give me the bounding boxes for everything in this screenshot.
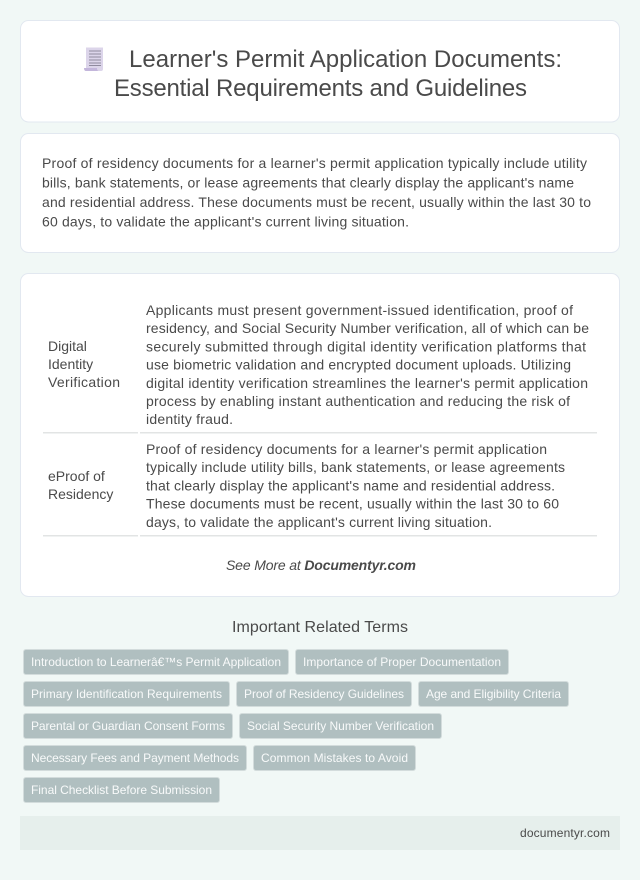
row text: Digital Identity Verification: use biometric validation and encrypted document uploads. Utilizing bbox=[146, 357, 571, 373]
row label: Digital Identity Verification: Identity bbox=[48, 356, 93, 372]
intro paragraph: 60 days, to validate the applicant's current living situation. bbox=[42, 214, 409, 230]
related term chips bbox=[24, 650, 568, 802]
row text: eProof of Residency: Proof of residency documents for a learner's permit application bbox=[146, 441, 547, 457]
row label: Digital Identity Verification bbox=[48, 338, 120, 390]
icon: document scroll bbox=[84, 48, 103, 71]
chip bbox=[24, 714, 232, 738]
row text: Digital Identity Verification: residency, and Social Security Number verification, all of which can be bbox=[146, 320, 589, 336]
row text: Digital Identity Verification: process by enabling instant authentication and reducing the risk of bbox=[146, 393, 570, 409]
chip bbox=[240, 714, 442, 738]
title bbox=[114, 46, 562, 102]
chip bbox=[24, 778, 220, 802]
footer bar bbox=[20, 816, 620, 850]
title: Learner's Permit Application Documents: bbox=[129, 46, 562, 73]
chip: Introduction to Learnerâ€™s Permit Application bbox=[31, 655, 281, 669]
chip: Final Checklist Before Submission bbox=[31, 783, 212, 797]
row label: Digital Identity Verification: Digital bbox=[48, 338, 87, 354]
row text: eProof of Residency: that clearly display the applicant's name and residential address. bbox=[146, 477, 555, 493]
see more link: See More at Documentyr.com bbox=[226, 557, 416, 573]
chip bbox=[418, 682, 568, 706]
intro paragraph: bills, bank statements, or lease agreements that clearly display the applicant's name bbox=[42, 174, 574, 190]
chip: Primary Identification Requirements bbox=[31, 687, 222, 701]
panel: introduction bbox=[20, 134, 620, 252]
intro paragraph: and residential address. These documents must be recent, usually within the last 30 to bbox=[42, 194, 591, 210]
chip bbox=[24, 682, 230, 706]
chip: Social Security Number Verification bbox=[247, 719, 434, 733]
chip bbox=[236, 682, 412, 706]
row label: eProof of Residency bbox=[48, 468, 113, 502]
chip: Necessary Fees and Payment Methods bbox=[31, 751, 239, 765]
row text: eProof of Residency: days, to validate the applicant's current living situation. bbox=[146, 514, 492, 530]
chip: Proof of Residency Guidelines bbox=[244, 687, 404, 701]
chip bbox=[24, 650, 288, 674]
chip: Common Mistakes to Avoid bbox=[261, 751, 408, 765]
row text: Digital Identity Verification: securely submitted through digital identity verification platforms that bbox=[146, 338, 586, 354]
row text: Digital Identity Verification bbox=[146, 302, 589, 427]
chip: Age and Eligibility Criteria bbox=[426, 687, 561, 701]
intro paragraph: Proof of residency documents for a learner's permit application typically include utility bbox=[42, 155, 587, 171]
row label: eProof of Residency: Residency bbox=[48, 486, 113, 502]
row text: Digital Identity Verification: Applicants must present government-issued identification, proof of bbox=[146, 302, 573, 318]
row text: Digital Identity Verification: identity fraud. bbox=[146, 411, 233, 427]
row label: eProof of Residency: eProof of bbox=[48, 468, 105, 484]
row text: eProof of Residency: These documents must be recent, usually within the last 30 to 60 bbox=[146, 496, 559, 512]
row text: eProof of Residency: typically include utility bills, bank statements, or lease agreements bbox=[146, 459, 565, 475]
panel: document table bbox=[20, 274, 620, 596]
row text: Digital Identity Verification: digital identity verification streamlines the learner's permit application bbox=[146, 375, 588, 391]
title: Essential Requirements and Guidelines bbox=[114, 75, 527, 102]
heading: related terms: Important Related Terms bbox=[232, 619, 408, 636]
chip bbox=[24, 746, 246, 770]
row text: eProof of Residency bbox=[146, 441, 565, 530]
chip: Importance of Proper Documentation bbox=[303, 655, 501, 669]
chip: Parental or Guardian Consent Forms bbox=[31, 719, 225, 733]
chip bbox=[254, 746, 416, 770]
row label: Digital Identity Verification: Verification bbox=[48, 374, 120, 390]
panel: title card bbox=[20, 20, 620, 122]
chip bbox=[296, 650, 508, 674]
footer bar: documentyr.com bbox=[520, 826, 610, 840]
intro paragraph bbox=[42, 155, 591, 230]
